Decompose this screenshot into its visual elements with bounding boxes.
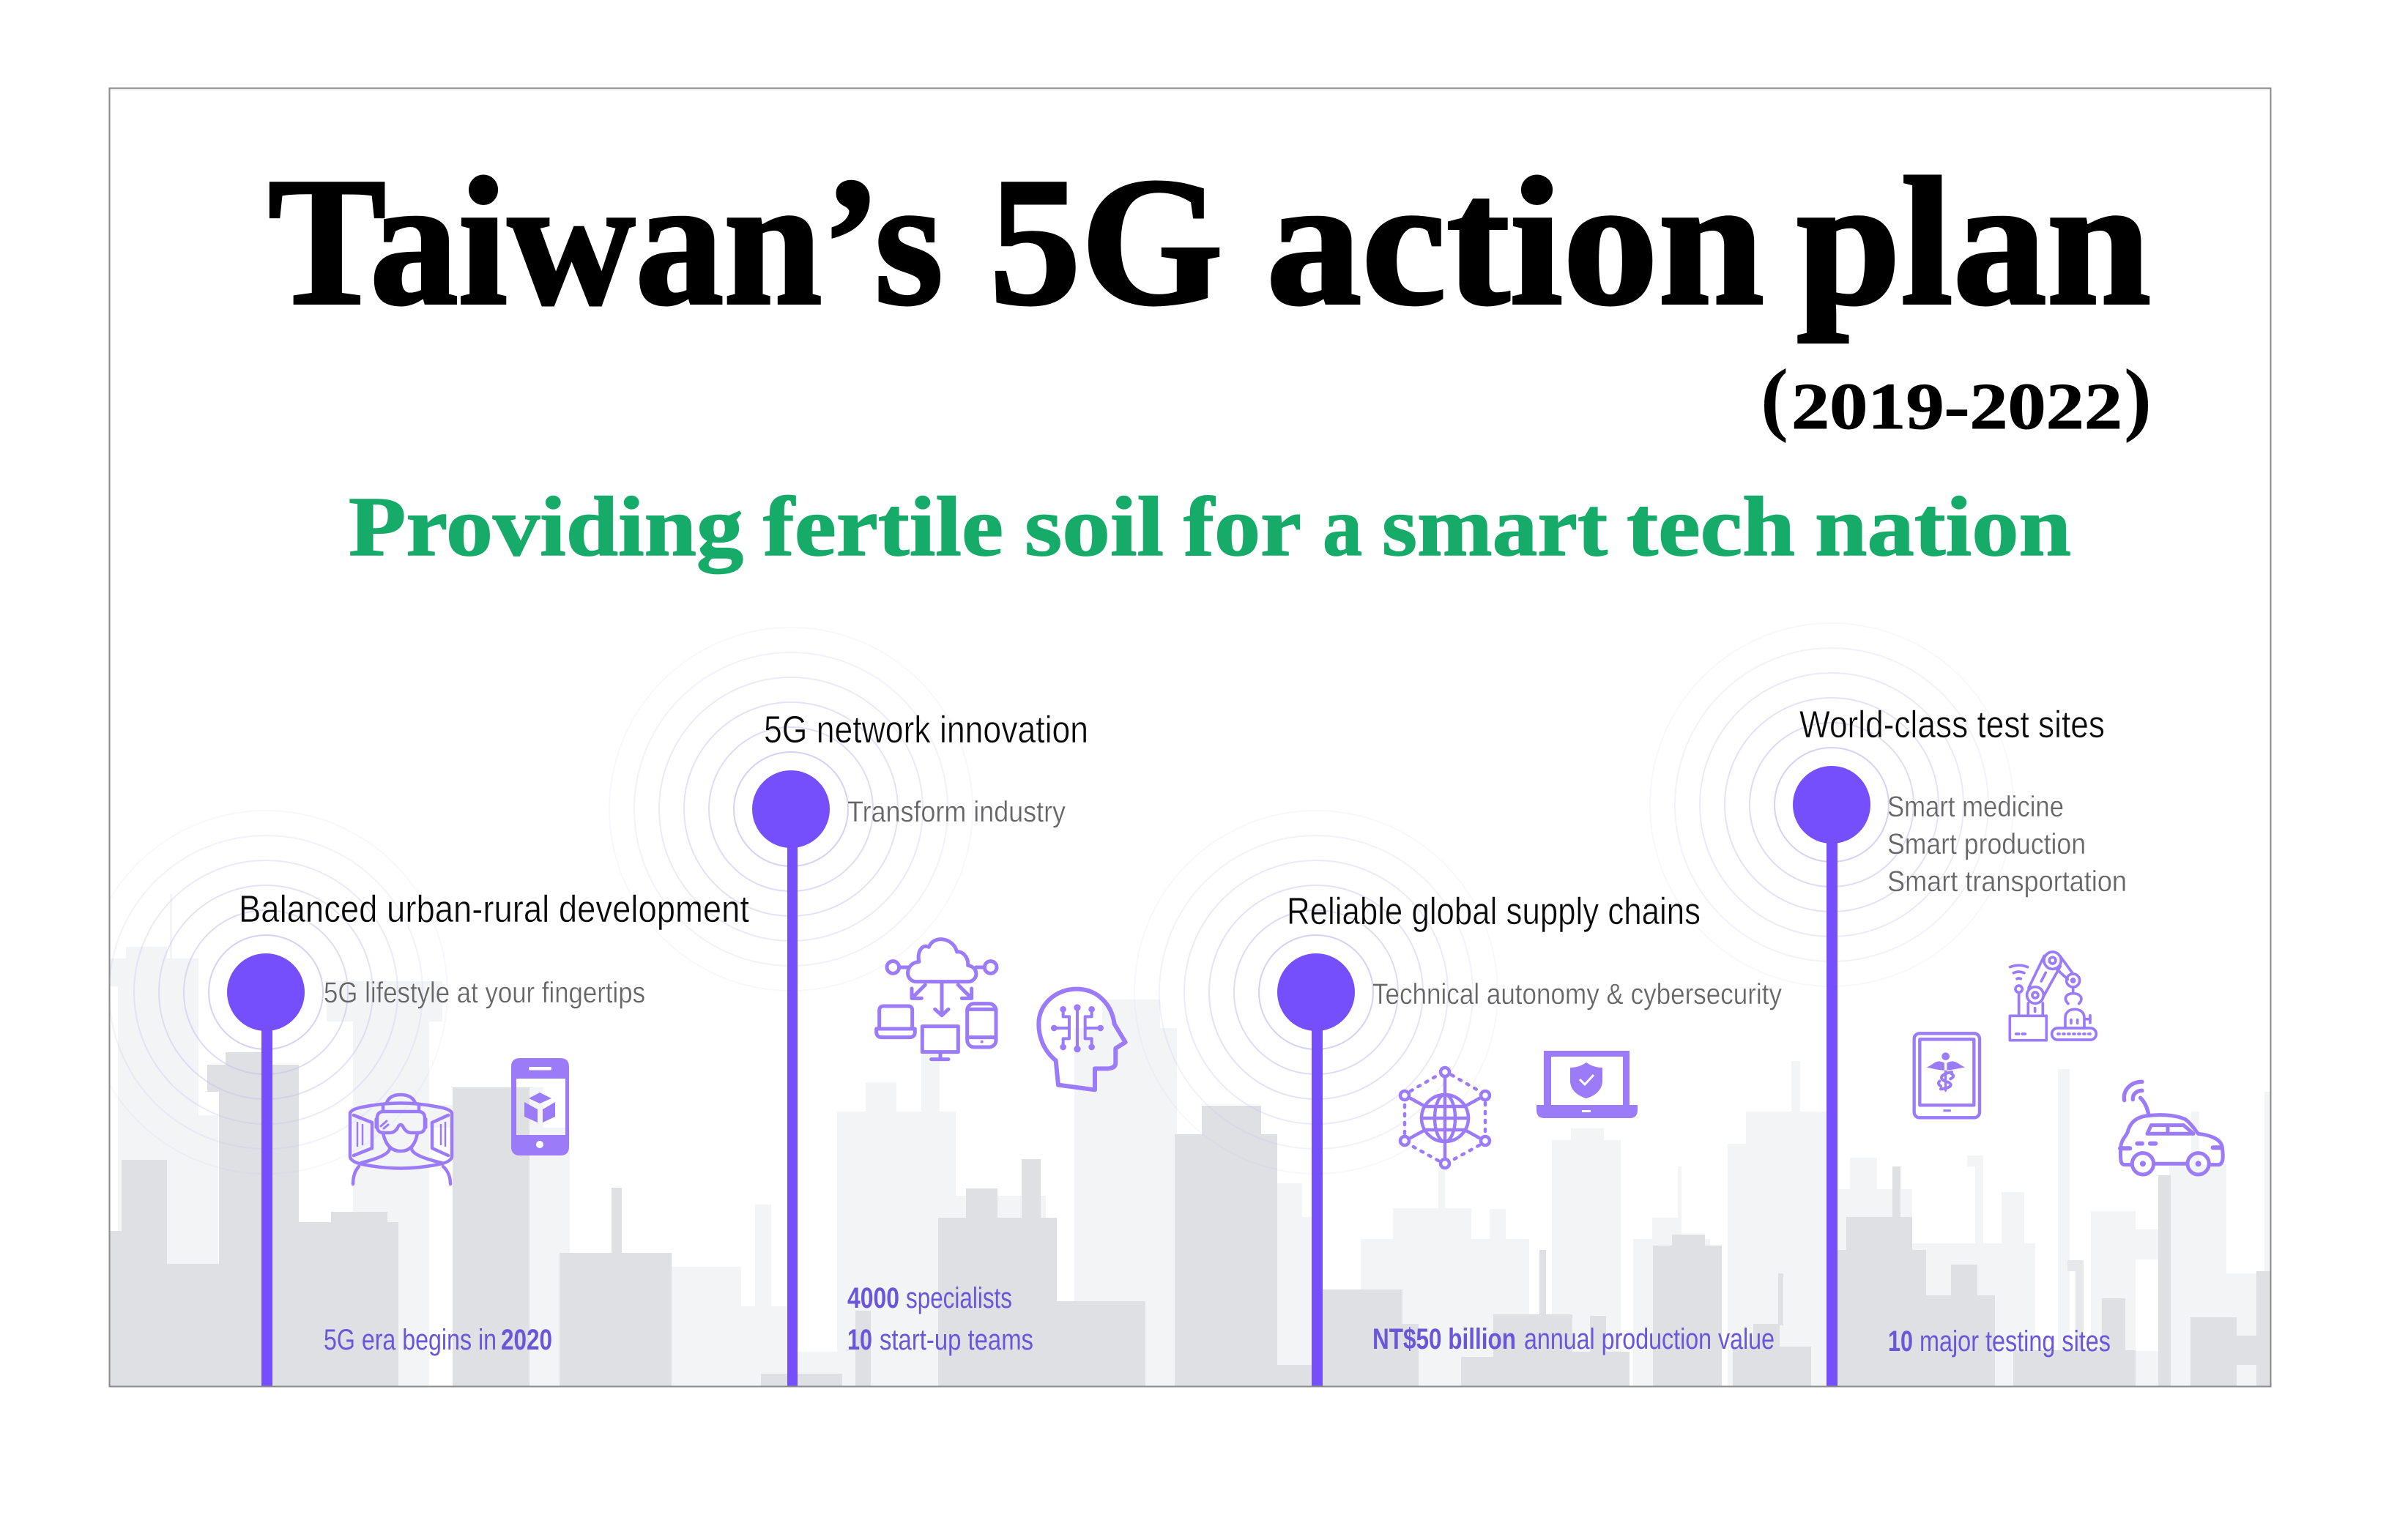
signal rings [84, 623, 2013, 1174]
subtitle: a [1323, 480, 1362, 574]
pin 1: balanced urban-rural development [227, 888, 749, 1387]
icon: connected car [2120, 1082, 2223, 1175]
stat 2: specialists [906, 1282, 1012, 1314]
stat 3 [1372, 1323, 1775, 1355]
title [268, 141, 2151, 343]
stat 4: major testing sites [1920, 1325, 2111, 1358]
pin 4: world-class test sites [1793, 704, 2127, 1387]
stat 2: start-up teams [880, 1324, 1033, 1356]
subtitle: for [1183, 480, 1301, 574]
text 1: 5G lifestyle at your fingertips [324, 977, 645, 1009]
infographic [108, 88, 2272, 1387]
text 4 [1887, 791, 2127, 898]
years: ) [2124, 353, 2152, 444]
subtitle: smart [1382, 480, 1608, 574]
icon: laptop with shield [1536, 1051, 1638, 1118]
icon: globe network [1400, 1068, 1490, 1168]
heading 3: Reliable global supply chains [1287, 890, 1701, 933]
frame [110, 88, 2270, 1387]
subtitle: Providing [349, 480, 743, 574]
stat 3: annual production value [1524, 1323, 1775, 1355]
title: 5G [989, 141, 1223, 343]
icon: cloud network [877, 939, 997, 1060]
icon: VR headset [350, 1095, 452, 1184]
subtitle: tech [1627, 480, 1795, 574]
stat 1: 5G era begins in [324, 1324, 497, 1356]
skyline background [109, 894, 2271, 1387]
icon: AI head [1038, 989, 1126, 1090]
icon: robot arm [2010, 952, 2096, 1041]
stat 2: 10 [847, 1324, 872, 1356]
stat 3: NT$50 billion [1372, 1323, 1516, 1355]
icon: medical tablet [1914, 1033, 1980, 1117]
subtitle: nation [1815, 480, 2071, 574]
stat 1: 2020 [501, 1324, 552, 1356]
heading 4: World-class test sites [1799, 704, 2105, 746]
pin 2: 5G network innovation [752, 709, 1088, 1387]
years [1761, 353, 2152, 444]
years: ( [1761, 353, 1788, 444]
years: 2019-2022 [1791, 371, 2122, 443]
pin 3: reliable global supply chains [1277, 890, 1782, 1387]
text 3: Technical autonomy & cybersecurity [1372, 978, 1782, 1010]
text 4: Smart production [1887, 828, 2086, 860]
heading 1: Balanced urban-rural development [239, 888, 749, 931]
stat 2 [847, 1282, 1033, 1356]
subtitle [349, 480, 2071, 574]
stat 2: 4000 [847, 1282, 899, 1314]
stat 4: 10 [1888, 1325, 1913, 1358]
subtitle: soil [1025, 480, 1164, 574]
text 2: Transform industry [847, 796, 1066, 828]
title: Taiwan’s [268, 141, 943, 343]
text 4: Smart medicine [1887, 791, 2064, 823]
title: action [1266, 141, 1764, 343]
heading 2: 5G network innovation [764, 709, 1088, 751]
title: plan [1796, 141, 2151, 343]
icon: phone with cube [511, 1058, 569, 1155]
text 4: Smart transportation [1887, 866, 2127, 898]
subtitle: fertile [763, 480, 1003, 574]
